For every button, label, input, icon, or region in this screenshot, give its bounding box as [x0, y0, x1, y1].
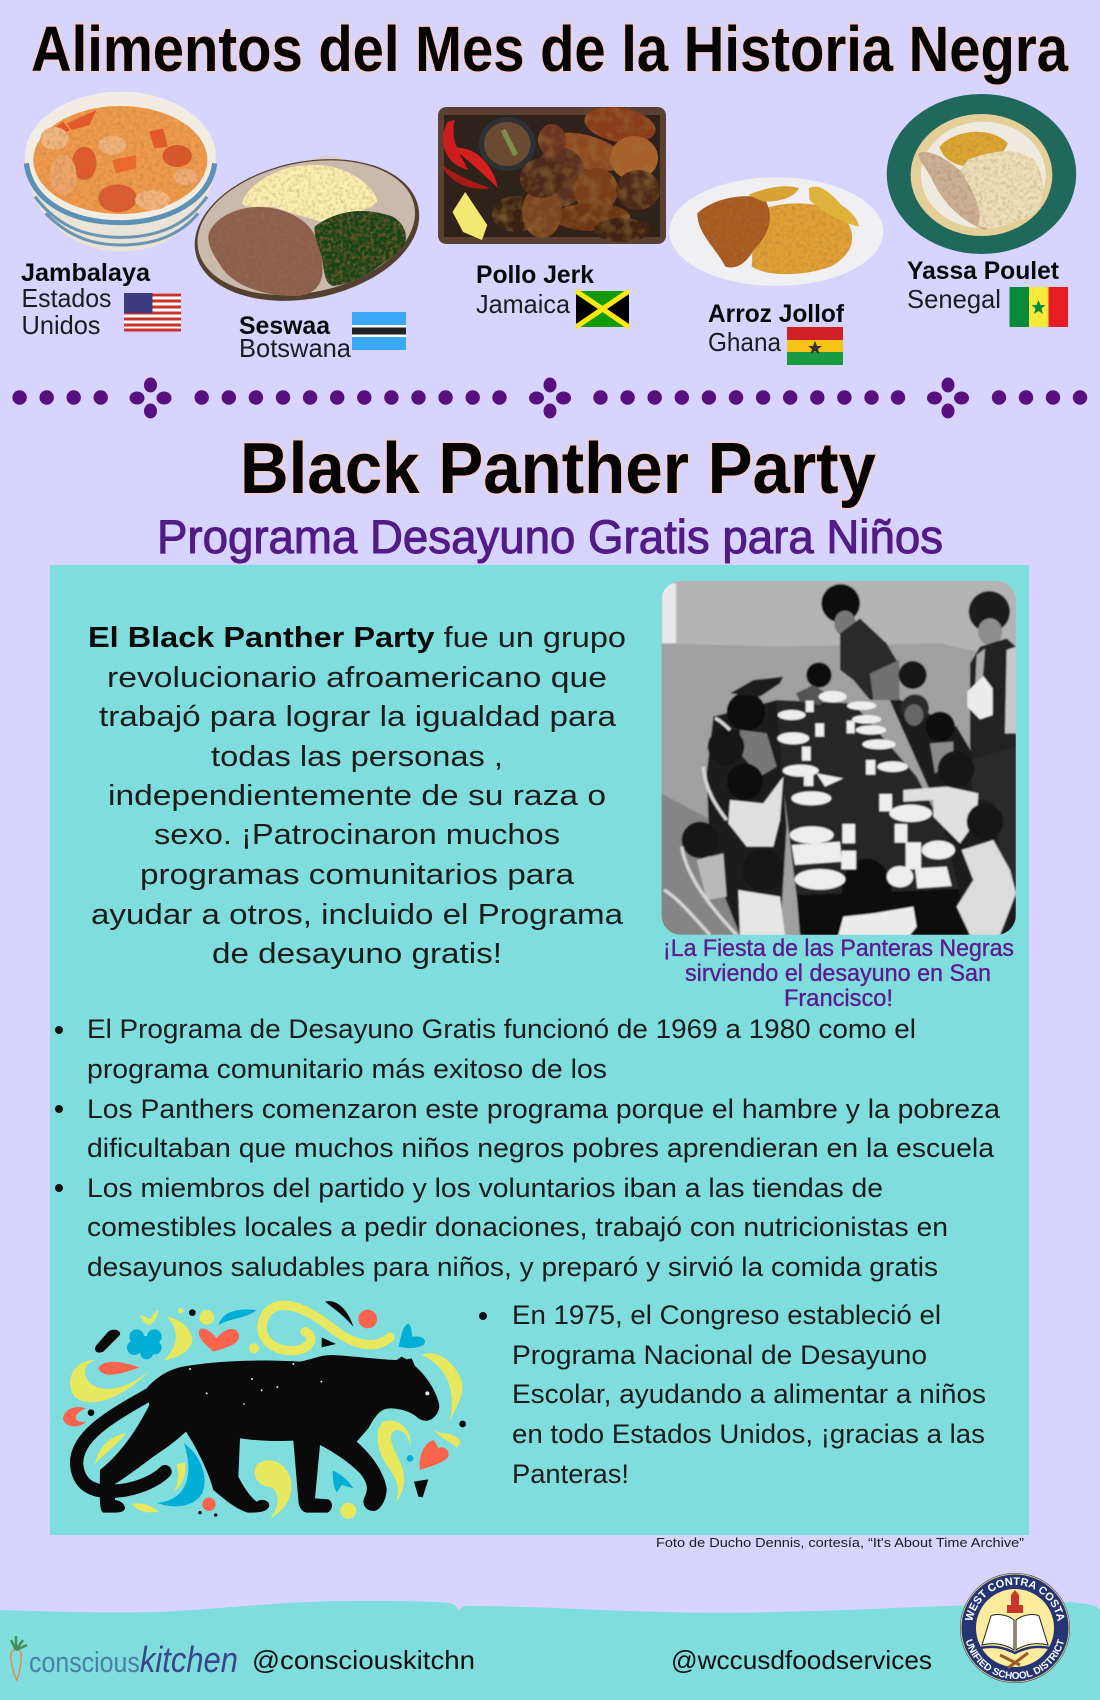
wordmark: consciouskitchen: [29, 1639, 238, 1680]
bullet: 1975 school breakfast: Escolar, ayudando a alimentar a niños: [512, 1379, 986, 1409]
seal text bottom: UNIFIED SCHOOL DISTRICT: [966, 1638, 1064, 1679]
bullet 1: programa comunitario más exitoso de los: [87, 1054, 607, 1084]
photo: Black Panther Party serving breakfast: [661, 581, 1016, 935]
label: Estados Unidos: Unidos: [22, 310, 100, 340]
chairs: [664, 718, 737, 935]
bullet 2: Los Panthers comenzaron este programa porque el hambre y la pobreza: [87, 1094, 1001, 1124]
food item: Arroz Jollof: [669, 177, 883, 365]
food item: Yassa Poulet: [887, 94, 1076, 327]
flag: Ghana: [787, 327, 843, 365]
social handle: wccusd food services: @wccusdfoodservices: [671, 1645, 932, 1675]
flag: Senegal: [1010, 287, 1068, 327]
photo credit: Foto de Ducho Dennis, cortesía, “It's About Time Archive”: [656, 1535, 1024, 1550]
shadowed rows of seated children: [707, 700, 787, 935]
intro paragraph: todas las personas ,: [211, 741, 503, 773]
figure: man with milk carton: [967, 591, 1016, 880]
bullet: 1975 school breakfast: En 1975, el Congreso estableció el: [512, 1300, 941, 1330]
intro paragraph: ayudar a otros, incluido el Programa: [91, 899, 624, 931]
panel: teal content background: [50, 565, 1029, 1535]
photo caption: sirviendo el desayuno en San: [685, 960, 991, 987]
image: seswaa plate: [180, 139, 434, 321]
label: Senegal: Senegal: [907, 284, 1001, 314]
image: jollof plate: [669, 177, 883, 286]
icon: carrot: [11, 1636, 27, 1680]
label: Estados Unidos: [22, 283, 112, 340]
intro paragraph: de desayuno gratis!: [212, 938, 502, 970]
bullet: 1975 school breakfast: [479, 1300, 986, 1489]
label: Jambalaya: Jambalaya: [21, 259, 151, 287]
bullet 1: El Programa de Desayuno Gratis funcionó de 1969 a 1980 como el: [87, 1014, 916, 1044]
bullet 3: [55, 1173, 948, 1282]
bullet 2: [55, 1094, 1001, 1163]
seal: West Contra Costa Unified School District: [960, 1573, 1070, 1683]
bullet: 1975 school breakfast: Programa Nacional de Desayuno: [512, 1340, 927, 1370]
heading: Black Panther Party: Black Panther Party: [240, 429, 876, 509]
image: jambalaya bowl: [25, 92, 216, 252]
table settings: plates and cups: [777, 691, 955, 890]
intro paragraph: [88, 622, 626, 970]
intro paragraph: revolucionario afroamericano que: [107, 662, 607, 694]
icon: open book: [980, 1615, 1050, 1653]
illustration: black panther with folk decorations: [63, 1301, 466, 1519]
seal text top: WEST CONTRA COSTA: [964, 1577, 1064, 1622]
flag: USA: [124, 293, 181, 331]
social handle: conscious kitchen: @consciouskitchn: [252, 1645, 475, 1675]
bullet: 1975 school breakfast: Panteras!: [512, 1459, 629, 1489]
food item: Seswaa: [180, 139, 434, 363]
label: Ghana: Ghana: [708, 327, 781, 357]
intro paragraph: programas comunitarios para: [140, 859, 575, 891]
logo: consciouskitchen: [11, 1636, 238, 1680]
intro paragraph: independientemente de su raza o: [108, 780, 606, 812]
bullet list: [55, 1014, 1001, 1282]
label: Pollo Jerk: Pollo Jerk: [476, 261, 594, 289]
food item: Jambalaya: [21, 92, 216, 340]
subheading: Programa Desayuno Gratis para Niños: Programa Desayuno Gratis para Niños: [157, 510, 943, 563]
photo caption: Francisco!: [784, 985, 893, 1012]
label: Yassa Poulet: Yassa Poulet: [907, 257, 1060, 285]
photo caption: [663, 935, 1014, 1012]
label: Botswana: Botswana: [239, 333, 352, 363]
bullet 2: dificultaban que muchos niños negros pobres aprendieran en la escuela: [87, 1133, 995, 1163]
flag: Botswana: [352, 312, 406, 350]
decorative dotted divider: [12, 378, 1087, 418]
intro paragraph: sexo. ¡Patrocinaron muchos: [154, 819, 560, 851]
food item: Pollo Jerk: [438, 102, 666, 327]
intro paragraph: El Black Panther Party fue un grupo: [88, 622, 626, 654]
icon: school building: [1007, 1590, 1023, 1613]
intro paragraph: trabajó para lograr la igualdad para: [99, 701, 617, 733]
panther silhouette: [77, 1355, 439, 1513]
decorations: [70, 1308, 463, 1519]
photo caption: ¡La Fiesta de las Panteras Negras: [663, 935, 1014, 962]
figure: woman serving: [821, 584, 899, 700]
footer band: [0, 1601, 1100, 1700]
label: Estados Unidos: Estados: [22, 283, 112, 313]
label: Seswaa: Seswaa: [239, 312, 331, 340]
icon: crossed pencils: [1000, 1653, 1028, 1668]
label: Jamaica: Jamaica: [476, 289, 571, 319]
figures: seated children: [682, 661, 1016, 935]
bullet 1: [55, 1014, 916, 1084]
image: yassa plate: [887, 94, 1076, 254]
bullet 3: desayunos saludables para niños, y preparó y sirvió la comida gratis: [87, 1252, 938, 1282]
label: Arroz Jollof: Arroz Jollof: [708, 300, 845, 328]
flag: Jamaica: [576, 291, 629, 327]
bullet 3: Los miembros del partido y los voluntarios iban a las tiendas de: [87, 1173, 883, 1203]
image: jerk chicken board: [438, 102, 666, 244]
bullet: 1975 school breakfast: en todo Estados Unidos, ¡gracias a las: [512, 1419, 985, 1449]
bullet 3: comestibles locales a pedir donaciones, trabajó con nutricionistas en: [87, 1212, 948, 1242]
